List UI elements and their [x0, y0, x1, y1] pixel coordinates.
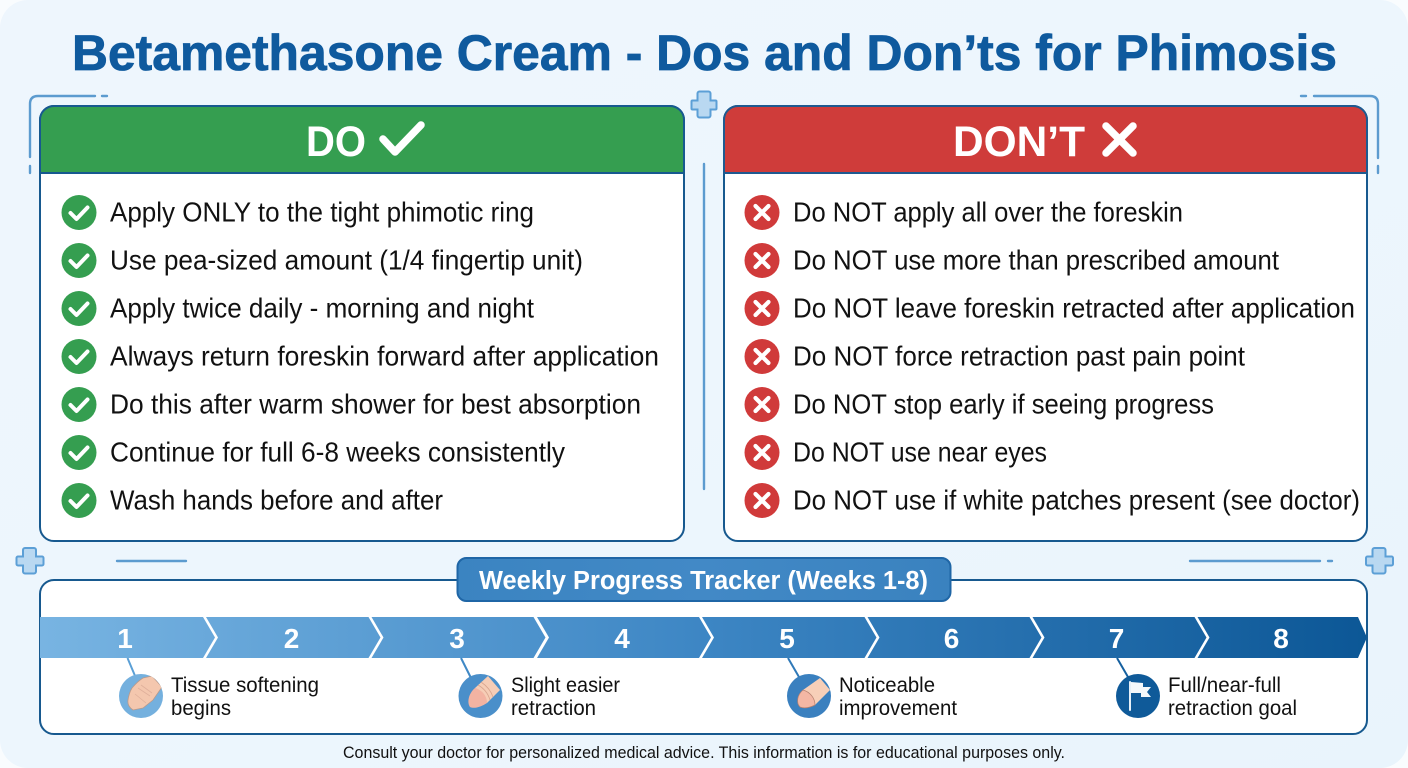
item 1: Apply ONLY to the tight phimotic ring	[110, 196, 534, 228]
item 7: Do NOT use if white patches present (see doctor)	[793, 484, 1360, 516]
item 1: Do NOT apply all over the foreskin	[793, 196, 1183, 228]
milestone: week 7	[1116, 658, 1297, 720]
week chevrons: 6	[944, 623, 959, 654]
milestone: week 5	[787, 658, 957, 720]
week chevrons: 1	[117, 623, 133, 654]
milestone: week 5: Noticeable	[839, 673, 935, 697]
item 5: Do NOT stop early if seeing progress	[793, 388, 1214, 420]
item 3: Apply twice daily - morning and night	[110, 292, 534, 324]
item 7: Wash hands before and after	[110, 484, 443, 516]
item 2: Do NOT use more than prescribed amount	[793, 244, 1279, 276]
week chevrons: 5	[779, 623, 795, 654]
don't heading: DON’T	[953, 118, 1085, 166]
milestone: week 1	[119, 658, 319, 720]
week chevrons: 8	[1273, 623, 1289, 654]
panel: weekly progress tracker	[40, 558, 1367, 734]
panel: do	[40, 106, 684, 541]
milestone: week 3: Slight easier	[511, 673, 620, 697]
milestone: week 1: begins	[171, 696, 231, 720]
icon: large check	[383, 125, 421, 152]
item 6: Do NOT use near eyes	[793, 436, 1047, 468]
item 4: Do NOT force retraction past pain point	[793, 340, 1245, 372]
milestone: week 3	[458, 658, 620, 720]
tracker heading tab	[458, 558, 950, 601]
tracker heading tab: Weekly Progress Tracker (Weeks 1-8)	[479, 567, 928, 595]
icon: large cross	[1106, 126, 1133, 153]
icon: medical plus left	[16, 548, 44, 574]
footer disclaimer: Consult your doctor for personalized medical advice. This information is for educational purposes only.	[343, 744, 1065, 762]
week chevrons: 4	[614, 623, 630, 654]
milestone: week 3: retraction	[511, 696, 596, 720]
item 3: Do NOT leave foreskin retracted after application	[793, 292, 1355, 324]
week chevrons: 2	[284, 623, 299, 654]
week chevrons	[40, 617, 1367, 658]
item 6	[744, 435, 1047, 470]
icon: medical plus top	[692, 92, 716, 118]
do heading: DO	[306, 118, 366, 166]
milestone: week 7: Full/near-full	[1168, 673, 1281, 697]
title: Betamethasone Cream - Dos and Don’ts for Phimosis	[72, 25, 1337, 81]
do list	[62, 195, 659, 518]
item 2: Use pea-sized amount (1/4 fingertip unit)	[110, 244, 583, 276]
don't list	[744, 195, 1360, 518]
milestone: week 7: retraction goal	[1168, 696, 1297, 720]
panel: don't	[724, 106, 1367, 541]
week chevrons: 7	[1109, 623, 1124, 654]
week chevrons: 3	[449, 623, 465, 654]
milestone: week 5: improvement	[839, 696, 957, 720]
item 4: Always return foreskin forward after application	[110, 340, 659, 372]
item 5: Do this after warm shower for best absorption	[110, 388, 641, 420]
item 6: Continue for full 6-8 weeks consistently	[110, 436, 565, 468]
do header bar	[40, 106, 684, 173]
icon: medical plus right	[1366, 548, 1393, 574]
don't header bar	[724, 106, 1367, 173]
milestone: week 1: Tissue softening	[171, 673, 319, 697]
